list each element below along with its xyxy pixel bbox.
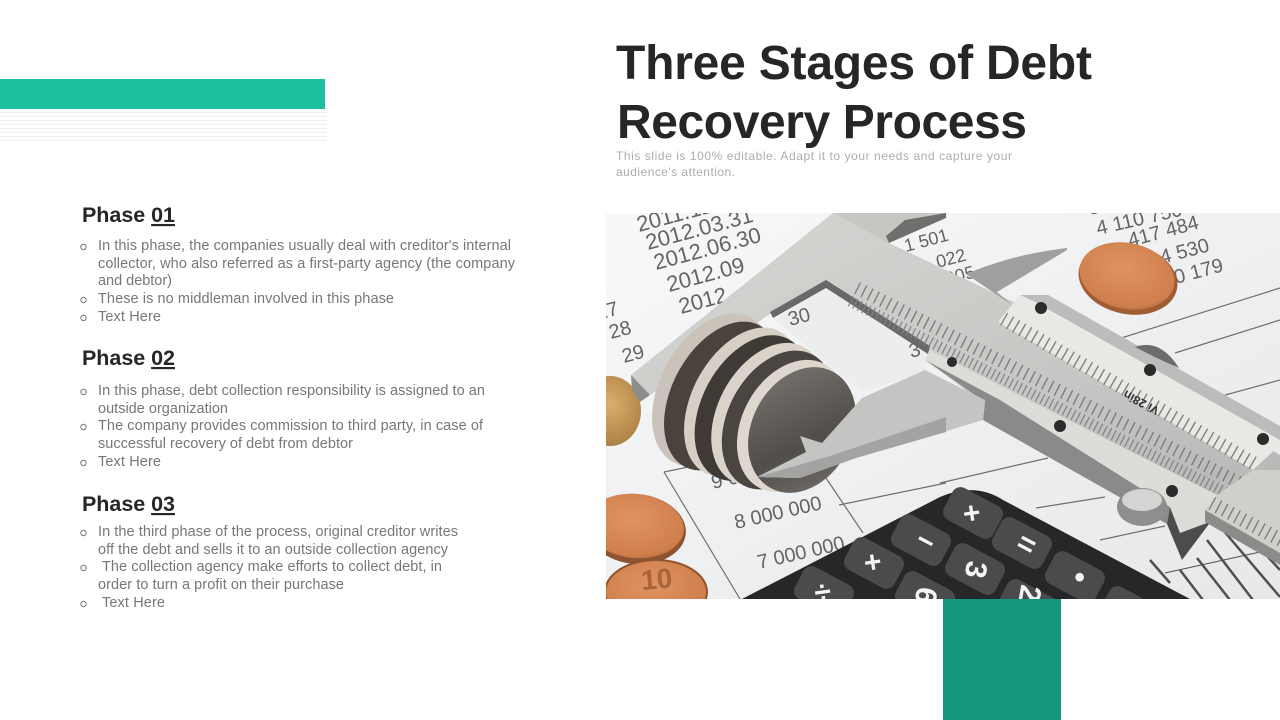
subtitle: This slide is 100% editable. Adapt it to your needs and capture your (616, 149, 1012, 163)
paper figures: 417 484 (1126, 212, 1201, 252)
paper figures: 28 (607, 317, 634, 344)
panel: phase 03 (81, 492, 458, 611)
caliper thumb wheels (1117, 345, 1179, 526)
calculator key symbols: • (1067, 561, 1092, 595)
caliper upper sliding plate (998, 295, 1280, 470)
bullet list: phase 03: In the third phase of the process, original creditor writes (98, 524, 458, 540)
paper figures: 33 (660, 420, 687, 447)
bullet list: phase 01: Text Here (98, 309, 161, 325)
copper coins bottom left: 10 (640, 562, 674, 596)
photo: caliper, coins and calculator (606, 213, 1280, 599)
bullet list: phase 03: The collection agency make efforts to collect debt, in (102, 559, 442, 575)
bullet list: phase 03 (81, 524, 458, 611)
decorative stripes (0, 112, 327, 140)
title: Recovery Process (617, 96, 1027, 149)
teal block below photo (943, 599, 1061, 720)
caliper beam right end (1205, 470, 1280, 565)
calculator key symbols (815, 505, 1084, 599)
bullet list: phase 01: collector, who also referred as a first-party agency (the company (98, 256, 516, 272)
calculator key symbols: 6 (908, 585, 943, 607)
caliper lower sliding plate (925, 350, 1217, 560)
paper figures: 7 000 000 (755, 532, 847, 574)
paper figures (594, 185, 1226, 574)
bullet list: phase 02: In this phase, debt collection responsibility is assigned to an (98, 383, 485, 399)
caliper beam and jaw (631, 213, 1280, 495)
paper ruled lines (664, 288, 1280, 599)
calculator keys (794, 487, 1144, 599)
paper figures: 2012 (676, 282, 730, 319)
coin stack (652, 314, 856, 493)
bullet list: phase 02: The company provides commission to third party, in case of (98, 418, 484, 434)
calculator key symbols: 2 (1012, 583, 1047, 605)
panel: phase 01 (81, 203, 516, 325)
paper figures: 29 (620, 341, 647, 368)
calculator key symbols: + (961, 496, 983, 531)
calculator key symbols: 3 (958, 559, 993, 581)
bullet list: phase 03: Text Here (102, 595, 165, 611)
title (616, 37, 1092, 149)
bullet list: phase 01: These is no middleman involved in this phase (98, 291, 394, 307)
gold coin left (606, 376, 641, 446)
caliper cutout (776, 290, 929, 360)
bullet list: phase 02: successful recovery of debt from debtor (98, 436, 353, 452)
heading: phase 01: Phase 01 (82, 203, 175, 227)
paper background (606, 213, 1280, 599)
paper figures: 27 (594, 298, 621, 325)
paper figures: 9 000 (709, 461, 763, 494)
paper figures: 1 501 (902, 225, 951, 256)
panel: phase 02 (81, 346, 485, 470)
calculator key symbols: − (910, 523, 941, 560)
paper figures: 8 000 000 (732, 492, 824, 534)
paper figures: 3 6 (1086, 192, 1118, 220)
caliper main scale ticks (848, 282, 1243, 501)
paper figures: 2012.09 (664, 252, 747, 297)
bullet list: phase 02 (81, 383, 485, 470)
cutout figures: 30 (786, 304, 813, 331)
calculator key symbols: + (862, 545, 884, 580)
caliper lower jaw (757, 370, 985, 478)
bullet list: phase 02: Text Here (98, 454, 161, 470)
copper coins bottom left (606, 494, 708, 599)
paper figures: 4 110 750 (1094, 199, 1184, 240)
caliper upper blade (966, 248, 1067, 305)
copper coin top right (1078, 242, 1178, 315)
paper figures: 022 (934, 245, 968, 272)
paper figures: 2012.03.31 (643, 202, 756, 255)
bullet list: phase 01: and debtor) (98, 273, 172, 289)
paper figures: 0 179 (1172, 255, 1226, 289)
bullet list: phase 03: off the debt and sells it to an outside collection agency (98, 542, 449, 558)
heading: phase 03: Phase 03 (82, 492, 175, 516)
calculator key symbols: ÷ (812, 575, 833, 610)
paper figures: 4 530 (1158, 235, 1212, 269)
calculator (742, 487, 1190, 599)
bullet list: phase 01 (81, 238, 516, 325)
title: Three Stages of Debt (616, 37, 1092, 90)
paper figures: 005 (943, 262, 977, 289)
bullet list: phase 02: outside organization (98, 401, 228, 417)
paper figures: 2012.06.30 (651, 222, 764, 275)
cutout figures (788, 308, 920, 357)
paper figures: 2011.12.31 (634, 185, 745, 237)
subtitle (616, 149, 1012, 179)
calculator key symbols: = (1011, 526, 1042, 563)
bullet list: phase 01: In this phase, the companies usually deal with creditor's internal (98, 238, 511, 254)
chart bars on paper (1150, 530, 1280, 600)
caliper upper sliding plate: Vi 28in (1121, 387, 1161, 418)
heading: phase 02: Phase 02 (82, 346, 175, 370)
subtitle: audience's attention. (616, 165, 735, 179)
bullet list: phase 03: order to turn a profit on their purchase (98, 577, 344, 593)
teal accent bar (0, 79, 325, 109)
cutout figures: 3 (907, 339, 923, 363)
